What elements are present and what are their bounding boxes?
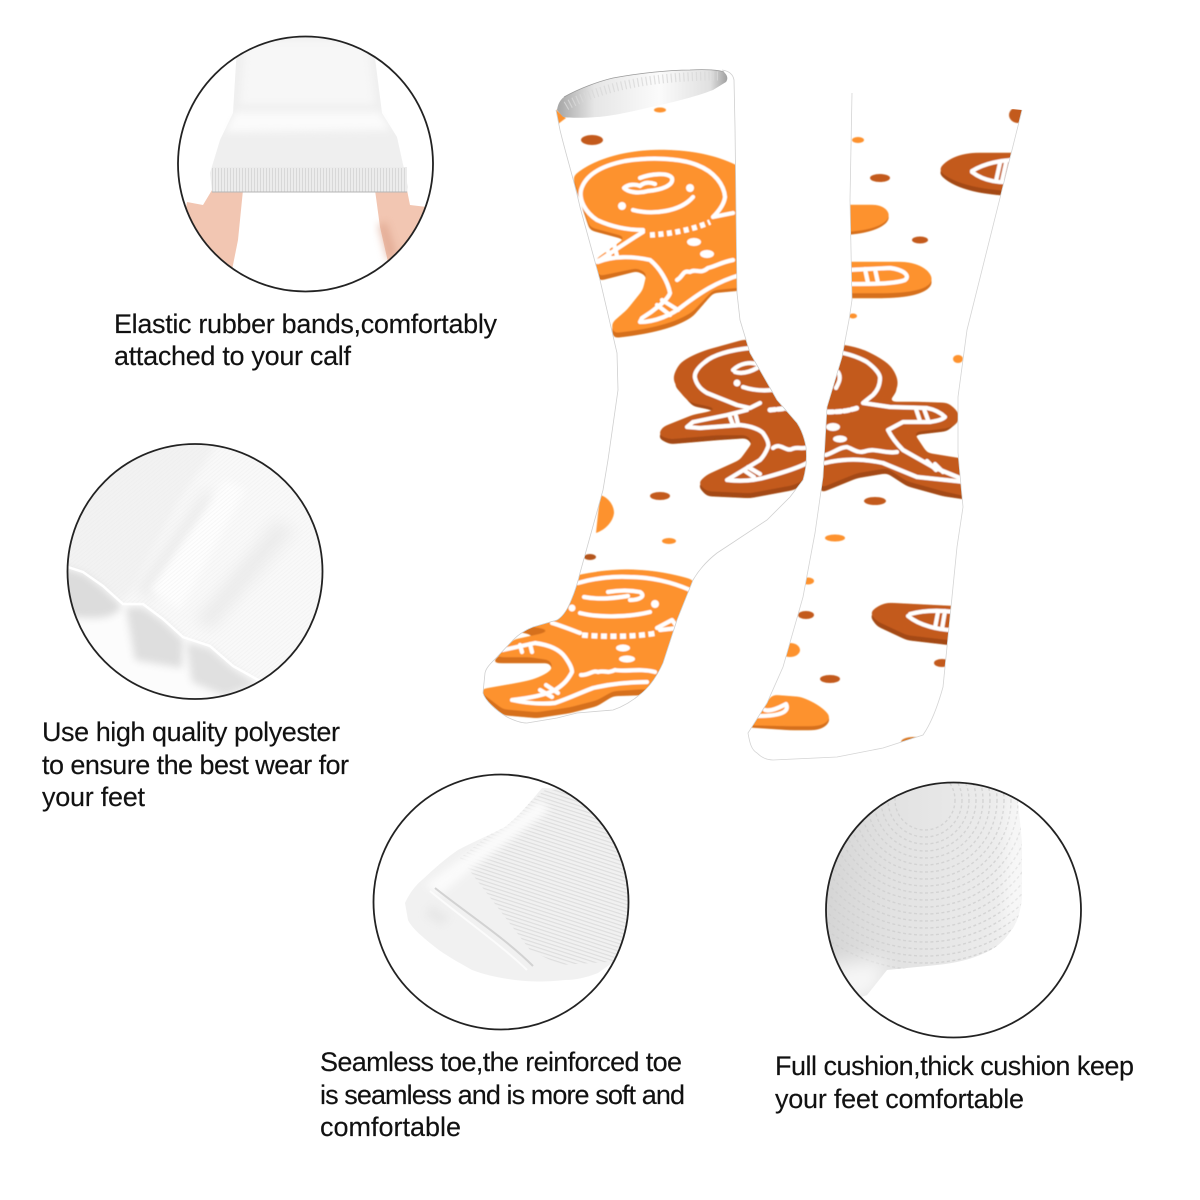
- caption: seamless toe: is seamless and is more soft and: [320, 1080, 685, 1110]
- gingerbread man: orange upper: [573, 150, 745, 338]
- caption: full cushion: your feet comfortable: [775, 1084, 1024, 1114]
- panel: polyester fabric circle: [60, 440, 330, 705]
- panel: full cushion circle: [825, 782, 1082, 1038]
- caption: elastic bands: attached to your calf: [114, 341, 351, 371]
- cookie piece: top right brown: [940, 152, 1011, 196]
- circle outline: [374, 774, 628, 1030]
- gingerbread man: orange foot: [478, 570, 700, 718]
- caption: polyester: Use high quality polyester: [42, 717, 340, 747]
- cookie piece: orange arm: [850, 204, 890, 236]
- photo: white sock toe: [405, 788, 628, 982]
- caption: full cushion: Full cushion,thick cushion keep: [775, 1051, 1134, 1081]
- cookie piece: orange hand: [840, 262, 932, 298]
- circle outline: [178, 36, 433, 292]
- right sock: [745, 93, 1030, 760]
- caption: seamless toe: Seamless toe,the reinforced toe: [320, 1047, 682, 1077]
- gingerbread man: brown right half: [815, 345, 970, 500]
- panel: product photo of socks: [478, 70, 1030, 760]
- circle outline: [826, 782, 1081, 1038]
- caption: polyester: to ensure the best wear for: [42, 750, 349, 780]
- left sock: [478, 70, 815, 723]
- gingerbread man: brown left half: [658, 340, 815, 498]
- cookie piece: orange lower: [745, 695, 830, 730]
- caption: seamless toe: comfortable: [320, 1112, 461, 1142]
- caption: polyester: your feet: [42, 782, 145, 812]
- photo: folded white fabric: [68, 445, 322, 696]
- orange partial blob: [596, 495, 614, 533]
- sock cuff opening: [557, 70, 727, 118]
- photo: sock cuff stretched over legs: [186, 38, 425, 268]
- cookie dots: [780, 107, 1027, 747]
- caption: elastic bands: Elastic rubber bands,comfortably: [114, 309, 498, 339]
- panel: elastic band circle: [175, 30, 435, 292]
- photo: cushioned sock heel: [827, 784, 1022, 997]
- panel: seamless toe circle: [374, 774, 640, 1030]
- cookie piece: brown lower: [870, 602, 951, 646]
- cookie dots: [554, 108, 676, 560]
- circle outline: [68, 444, 322, 699]
